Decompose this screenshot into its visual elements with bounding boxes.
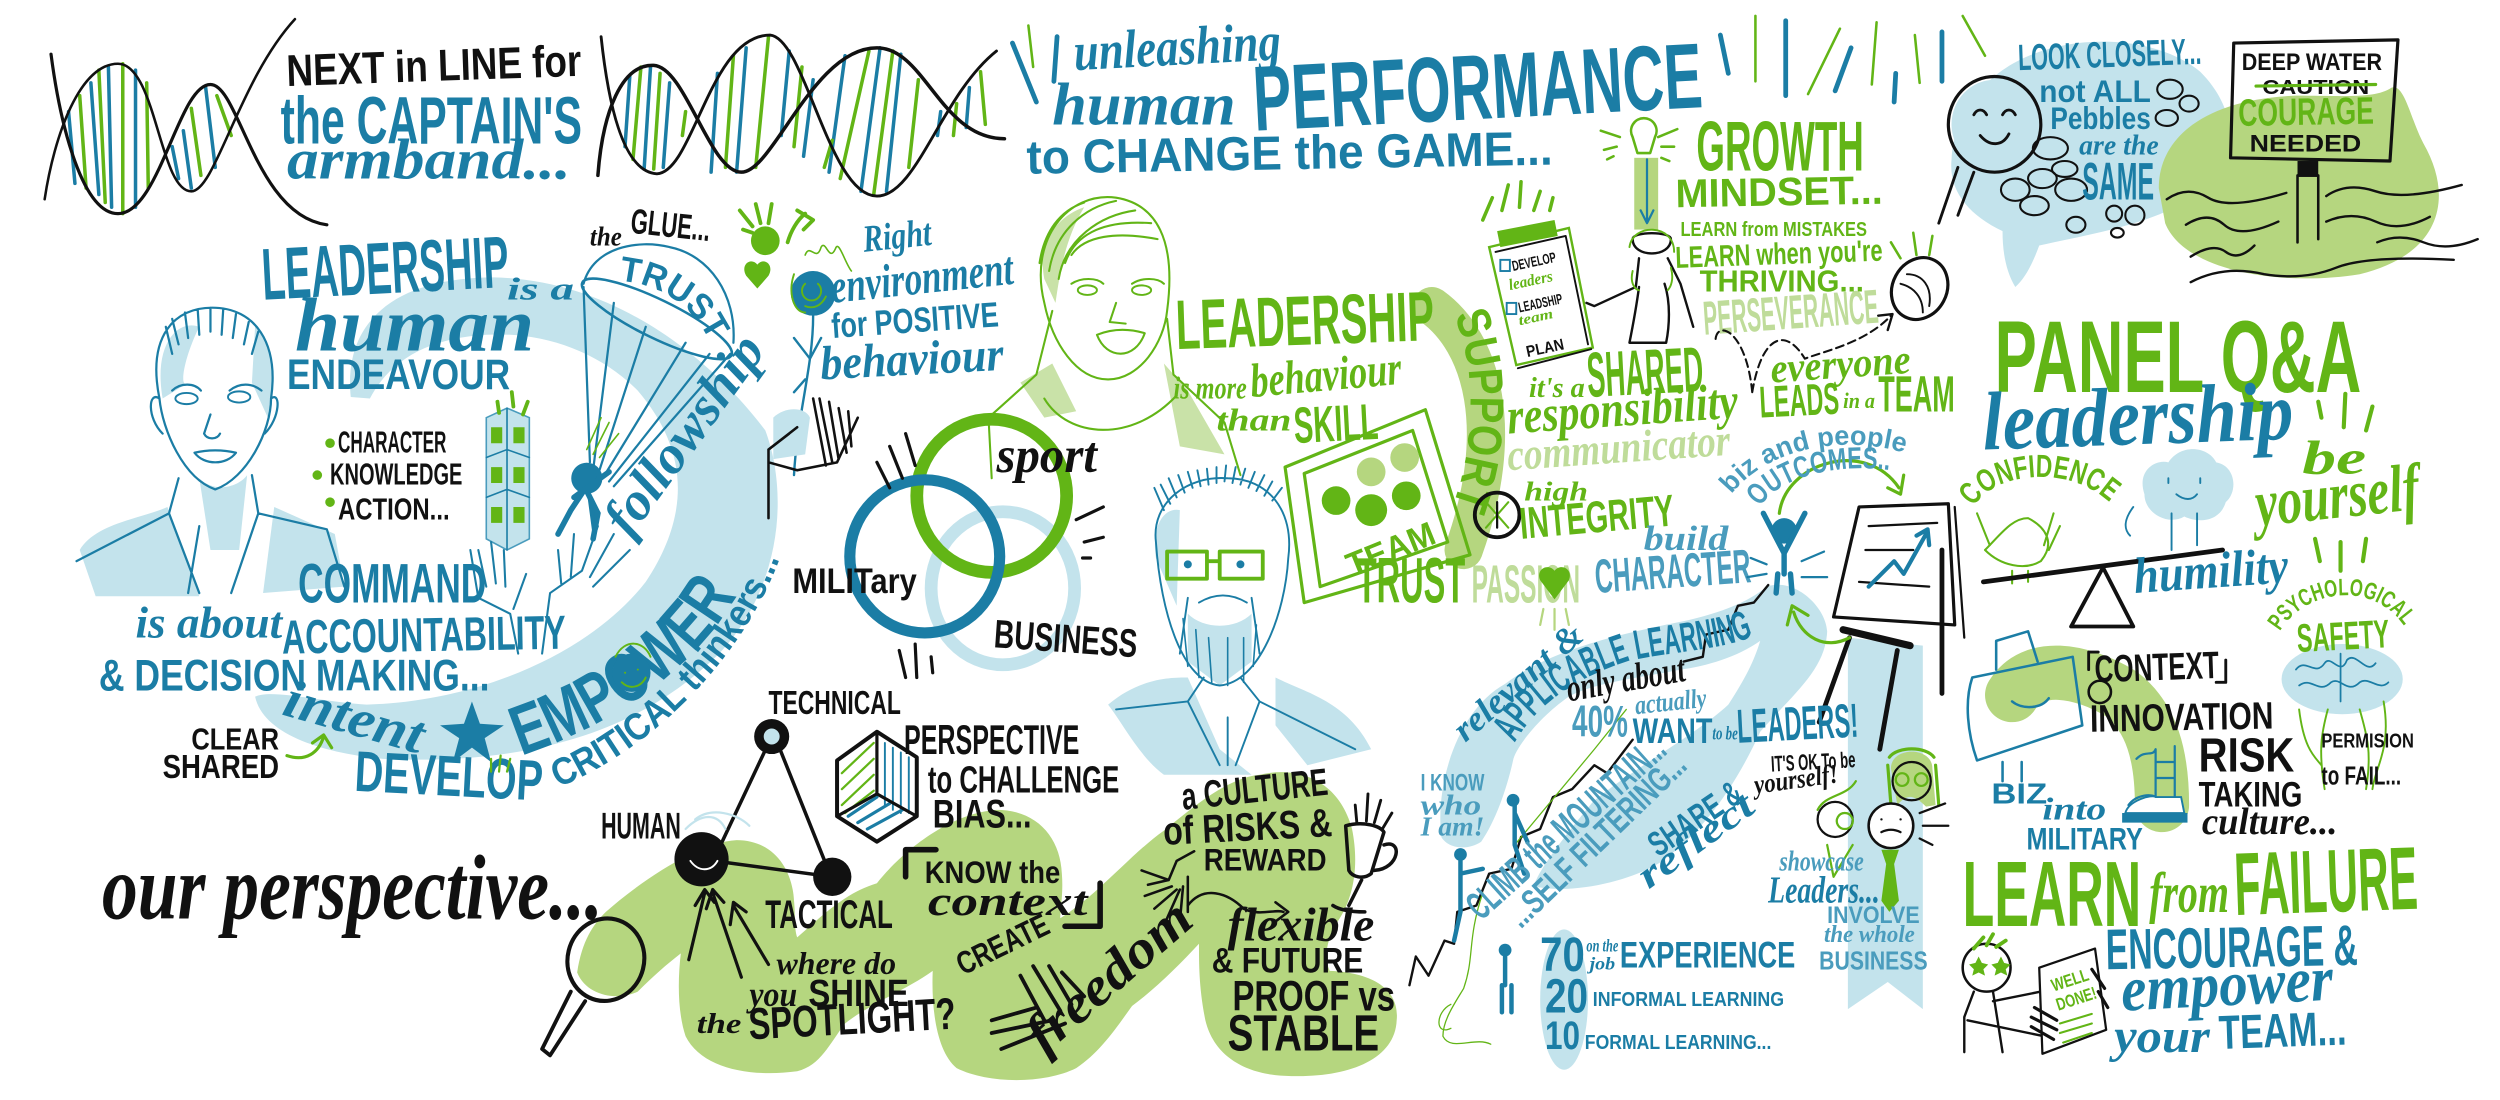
chart: venn diagram: BUSINESS (993, 612, 1139, 666)
background wash: learning blue band (1440, 585, 1827, 889)
text: where do you shine the spotlight: the (697, 1008, 742, 1040)
text: 70 20 10 learning model: EXPERIENCE (1620, 935, 1795, 976)
chart: venn diagram (792, 419, 1139, 678)
text: command accountability decision making: is about (136, 598, 284, 648)
text: showcase leaders involve the whole business: INVOLVE (1827, 902, 1920, 929)
text: clear shared: CLEAR (191, 723, 279, 756)
text: growth mindset block (1675, 108, 1883, 346)
title line: human: human (1052, 71, 1236, 138)
icon: clipboard (1483, 182, 1593, 368)
text: where do you shine the spotlight: SPOTLIGHT? (747, 990, 957, 1049)
text: flexible future proof vs stable (1188, 893, 1395, 1062)
icon: seesaw: humility (2132, 538, 2290, 605)
text: context innovation risk taking culture (2089, 644, 2337, 843)
text: leadership is more behaviour than skill: behaviour (1248, 342, 1404, 408)
text: 70 20 10 learning model: FORMAL LEARNING... (1585, 1031, 1771, 1054)
text: climb the mountain and self filtering (1458, 727, 1694, 935)
background wash: speech bubble (1951, 42, 2231, 287)
text: look closely: Pebbles (2050, 100, 2151, 136)
chart: mountain climb lines (1409, 585, 1768, 1044)
text: climb the mountain and self filtering: ...SELF FILTERING... (1500, 745, 1694, 935)
text: command accountability decision making: & DECISION MAKING... (99, 651, 489, 700)
icon: deep water sign: NEEDED (2250, 130, 2361, 157)
text: biz into military (1991, 778, 2143, 857)
icon: parachute with trust: TRUST (622, 256, 730, 334)
icon: confidence bird (1960, 454, 2122, 584)
text: encourage and empower your team: TEAM... (2218, 1003, 2347, 1060)
text: develop: DEVELOP (353, 740, 545, 814)
text: where do you shine the spotlight: you (746, 975, 797, 1014)
icon: seesaw (1983, 538, 2290, 627)
DNA helix centre (598, 35, 1004, 196)
text: everyone leads in a team: in a (1843, 388, 1875, 413)
text: only about 40 percent want to be leaders: only about (1563, 648, 1689, 710)
text: create freedom with hands: CREATE (950, 906, 1055, 982)
icon: team picture frame (1285, 410, 1470, 603)
text: biz into military: MILITARY (2026, 821, 2143, 857)
text: our perspective: our perspective... (102, 836, 603, 938)
icon: parachute with trust: the (590, 222, 622, 252)
icon: psychological safety brain (2267, 578, 2414, 790)
text: 70 20 10 learning model: 10 (1545, 1014, 1580, 1058)
portrait: blue speaker (1108, 466, 1371, 775)
text: flexible future proof vs stable: flexible (1228, 899, 1374, 952)
background wash: blue ribbon (1848, 638, 1923, 1009)
text: shared responsibility block: responsibility (1505, 374, 1740, 446)
text: culture of risks and reward (1162, 761, 1333, 877)
text: relevant and applicable learning: APPLICABLE LEARNING (1494, 612, 1751, 742)
chart: triangle of human technical tactical: HUMAN (601, 806, 681, 847)
text: PASSION (1472, 555, 1580, 615)
heading: learn from failure: LEARN (1963, 842, 2141, 946)
text: 70 20 10 learning model: job (1586, 953, 1615, 973)
text: where do you shine the spotlight (689, 890, 957, 1049)
title line: to change the game: to CHANGE the GAME... (1026, 123, 1553, 185)
title rays (1012, 16, 1985, 102)
text: showcase leaders involve the whole business: BUSINESS (1819, 947, 1928, 975)
text: shared responsibility block: it's a (1529, 372, 1585, 404)
text: PERSEVERANCE (1701, 281, 1880, 346)
text: flexible future proof vs stable: & FUTURE (1212, 941, 1363, 980)
text: right environment for positive behaviour: Right (860, 212, 934, 261)
icon: deep water sign: COURAGE (2238, 90, 2374, 135)
text: create freedom with hands (950, 887, 1204, 1064)
text: command accountability decision making (99, 552, 566, 700)
text: where do you shine the spotlight: SHINE (808, 972, 909, 1015)
text: showcase leaders involve the whole business (1767, 845, 1928, 975)
icon: deep water sign (2231, 40, 2398, 242)
icon: team picture frame: TEAM (1341, 516, 1441, 585)
text: only about 40 percent want to be leaders: to be (1712, 724, 1738, 745)
text: know the context (906, 850, 1100, 926)
chart: triangle of human technical tactical: TACTICAL (765, 893, 893, 937)
icon: magnifier (542, 910, 653, 1055)
curved text: followship: followship (591, 322, 776, 546)
text: 70 20 10 learning model: INFORMAL LEARNING (1593, 988, 1784, 1011)
text: biz into military: into (2042, 791, 2106, 826)
text: only about 40 percent want to be leaders: actually (1633, 683, 1709, 720)
title: unleashing human performance: unleashing (1072, 11, 1282, 82)
text: context innovation risk taking culture: TAKING (2199, 776, 2302, 815)
curved heading: empower: EMPOWER (508, 576, 736, 755)
icon: blue star (440, 701, 504, 762)
list: character knowledge action: ACTION... (338, 494, 450, 527)
text: showcase leaders involve the whole business: Leaders... (1767, 869, 1880, 911)
icon: psychological safety brain: PERMISION (2321, 730, 2414, 753)
text: i know who i am: I am! (1420, 811, 1484, 841)
icon: parachute with trust (555, 202, 735, 542)
script: be yourself: be (2302, 431, 2366, 484)
text: look closely: are the (2079, 130, 2159, 162)
text: leadership is more behaviour than skill: LEADERSHIP (1174, 277, 1435, 364)
text: context innovation risk taking culture: INNOVATION (2090, 695, 2274, 741)
text: growth mindset block: MINDSET... (1675, 169, 1883, 216)
title line: the captain's: the CAPTAIN'S (281, 83, 582, 158)
icon: psychological safety brain: PSYCHOLOGICAL (2267, 578, 2413, 630)
text: look closely: SAME (2082, 152, 2154, 211)
text: shared responsibility block (1505, 333, 1753, 604)
chart: triangle of human technical tactical (601, 685, 901, 937)
waves (2167, 185, 2478, 282)
text: growth mindset block: LEARN from MISTAKES (1680, 218, 1867, 241)
title: next in line (281, 37, 582, 192)
text: showcase leaders involve the whole business: showcase (1779, 845, 1864, 877)
text: command accountability decision making: ACCOUNTABILITY (281, 607, 566, 665)
heading: panel Q and A (1981, 300, 2427, 571)
background wash: bottom green wave (577, 772, 1397, 1080)
icon: person with well done paper: WELL (2049, 964, 2091, 995)
text: 70 20 10 learning model: 70 (1540, 929, 1585, 982)
text: leadership is more behaviour than skill (1173, 277, 1435, 454)
icon: bird (1142, 851, 1194, 921)
text: share and reflect: SHARE & (1641, 773, 1750, 864)
text: flexible future proof vs stable: PROOF vs (1232, 973, 1395, 1021)
icon: three people (1818, 749, 1948, 912)
text: context innovation risk taking culture: RISK (2199, 730, 2295, 783)
text: culture of risks and reward: a CULTURE (1179, 761, 1330, 819)
heading: learn from failure: from (2149, 862, 2229, 925)
icon: open hand with rays (768, 399, 858, 518)
text: only about 40 percent want to be leaders: 40% (1572, 698, 1628, 747)
text: look closely: not ALL (2039, 73, 2151, 109)
script: leadership: leadership (1981, 365, 2295, 468)
text: shared responsibility block: SHARED (1585, 333, 1705, 411)
text: climb the mountain and self filtering: CLIMB the MOUNTAIN... (1458, 727, 1674, 928)
text: know the context: context (928, 878, 1089, 924)
text: right environment for positive behaviour: behaviour (819, 328, 1005, 390)
text: it's ok to be yourself: yourself! (1750, 758, 1840, 800)
text: where do you shine the spotlight: where do (776, 946, 896, 981)
icon: easel with growth chart (1819, 504, 1964, 749)
icon: psychological safety brain: SAFETY (2296, 612, 2390, 661)
text: i know who i am: I KNOW (1421, 770, 1485, 797)
text: culture of risks and reward: of RISKS & (1162, 801, 1333, 854)
text: growth mindset block: GROWTH (1696, 108, 1864, 186)
chart: venn diagram: MILITary (792, 562, 917, 601)
text: encourage and empower your team: empower (2119, 943, 2336, 1025)
icon: blue figure and arrows: biz and people (1718, 428, 1906, 493)
text: shared responsibility block: communicator (1506, 415, 1732, 480)
text: know the context: KNOW the (925, 854, 1060, 890)
text: look closely: LOOK CLOSELY... (2017, 31, 2202, 78)
text: biz into military: BIZ (1991, 778, 2047, 810)
text: only about 40 percent want to be leaders (1563, 648, 1859, 754)
text: showcase leaders involve the whole business: the whole (1824, 922, 1915, 948)
text: leadership is more behaviour than skill: SKILL (1292, 393, 1380, 454)
DNA helix left (45, 19, 327, 225)
icon: person with well done paper (1963, 934, 2108, 1054)
text: perspective to challenge bias: PERSPECTIVE (904, 716, 1079, 763)
text: encourage and empower your team (2105, 914, 2358, 1063)
portrait: left speaker (77, 308, 344, 596)
icon: hatched cube (837, 732, 917, 842)
icon: flower with lightbulb (740, 204, 851, 475)
portrait: green speaker (989, 197, 1240, 478)
icon: parachute with trust: GLUE... (629, 202, 712, 249)
text: only about 40 percent want to be leaders: LEADERS! (1736, 695, 1859, 754)
icon: clipboard: PLAN (1525, 336, 1566, 361)
text: shared responsibility block: CHARACTER (1593, 540, 1753, 604)
text: context innovation risk taking culture: CONTEXT (2094, 644, 2220, 691)
icon: compass (1475, 493, 1519, 537)
text: share and reflect: reflect (1629, 783, 1764, 897)
icon: deep water sign: CAUTION (2262, 76, 2369, 99)
icon: lightbulb and person (1586, 118, 1693, 343)
icon: raising hands (470, 526, 630, 654)
heading: leadership is a human endeavour (260, 221, 574, 399)
list: character knowledge action: CHARACTER (338, 427, 446, 460)
heading: panel Q and A: yourself (2246, 450, 2427, 542)
text: context innovation risk taking culture: culture... (2202, 801, 2337, 843)
background wash: left blue swoosh (255, 277, 778, 760)
small text: is a: is a (507, 272, 574, 307)
text: 70 20 10 learning model: 20 (1545, 970, 1588, 1023)
title line: armband: armband... (287, 129, 571, 192)
title line: performance: PERFORMANCE (1250, 23, 1705, 151)
text: leadership is more behaviour than skill: than (1217, 402, 1291, 437)
icon: deep water sign: DEEP WATER (2242, 49, 2382, 76)
text: perspective to challenge bias: BIAS... (933, 792, 1032, 836)
text: shared responsibility block: high (1524, 477, 1588, 507)
text: 70 20 10 learning model (1540, 929, 1795, 1058)
chart: venn diagram: sport (996, 428, 1099, 484)
text: right environment for positive behaviour (819, 212, 1017, 390)
text: leadership is more behaviour than skill: is more (1173, 371, 1247, 406)
icon: person with well done paper: DONE! (2053, 983, 2099, 1015)
text: perspective to challenge bias (904, 716, 1119, 836)
text: everyone leads in a team: everyone (1769, 336, 1912, 392)
text: 70 20 10 learning model: on the (1586, 936, 1618, 956)
icon: blue figure and arrows (1718, 428, 1906, 644)
list: character knowledge action (312, 427, 462, 527)
text: create freedom with hands: freedom (1013, 887, 1204, 1064)
text: shared responsibility block: build (1644, 519, 1729, 558)
text: it's ok to be yourself: IT'S OK To be (1770, 747, 1856, 777)
text: only about 40 percent want to be leaders: WANT (1633, 712, 1713, 751)
text: support on band: SUPPORT (1456, 309, 1504, 516)
list: character knowledge action: KNOWLEDGE (330, 459, 462, 492)
text: shared responsibility block: INTEGRITY (1518, 487, 1676, 549)
text: command accountability decision making: COMMAND (298, 552, 486, 615)
heading: endeavour: ENDEAVOUR (287, 351, 510, 399)
icon: psychological safety brain: to FAIL... (2321, 762, 2401, 790)
curved text: intent: intent (277, 668, 434, 766)
text: encourage and empower your team: your (2109, 1010, 2210, 1063)
title: unleashing human performance (1026, 11, 1705, 185)
icon: building blocks (486, 392, 529, 550)
icon: trophy (1333, 794, 1396, 912)
text: clear shared: SHARED (163, 749, 279, 786)
icon: briefcase (1968, 631, 2082, 781)
text: everyone leads in a team (1758, 336, 1955, 428)
icon: clipboard: DEVELOP (1511, 250, 1558, 275)
text: everyone leads in a team: LEADS (1758, 375, 1840, 428)
heading: learn from failure (1963, 828, 2419, 946)
text: everyone leads in a team: TEAM (1878, 365, 1955, 422)
icon: magnifier with face (1939, 77, 2041, 223)
background wash: support band (1432, 306, 1486, 550)
text: right environment for positive behaviour: environment (828, 242, 1017, 314)
curved text: critical thinkers: CRITICAL thinkers... (552, 559, 779, 784)
icon: clipboard: leaders (1507, 268, 1554, 294)
text: growth mindset block: THRIVING... (1700, 266, 1864, 299)
icon: pebbles (2001, 80, 2199, 238)
text: i know who i am: who (1421, 790, 1481, 822)
text: right environment for positive behaviour: for POSITIVE (830, 295, 1000, 346)
icon: clipboard: LEADSHIP (1517, 291, 1564, 316)
heading: leadership is a human endeavour: LEADERSHIP (260, 221, 511, 316)
background wash: briefcase green arc (2012, 673, 2162, 805)
background wash: green circle (2159, 87, 2439, 278)
text: flexible future proof vs stable: STABLE (1228, 1005, 1379, 1062)
text: clear shared (163, 723, 332, 786)
icon: clipboard: team (1517, 306, 1555, 329)
text: growth mindset block: LEARN when you're (1675, 235, 1883, 275)
text: develop (353, 740, 545, 814)
text: culture of risks and reward: REWARD (1204, 841, 1327, 877)
icon: rugby ball and bounce path (1716, 233, 1959, 392)
text: relevant and applicable learning: relevant & (1445, 615, 1591, 749)
text: i know who i am (1420, 770, 1485, 841)
text: perspective to challenge bias: to CHALLENGE (928, 758, 1119, 801)
icon: boot and ladder (2122, 746, 2188, 823)
icon: humility cloud tree (2126, 449, 2233, 550)
icon: confidence bird: CONFIDENCE (1960, 454, 2122, 502)
text: share and reflect (1629, 773, 1764, 897)
text: look closely (2017, 31, 2202, 211)
chart: triangle of human technical tactical: TECHNICAL (768, 685, 901, 722)
background wash: 70-20-10 bubble (1540, 929, 1588, 1070)
text: trust and passion: TRUST (1357, 545, 1465, 617)
script: human: human (295, 283, 534, 368)
icon: green face on empower (612, 644, 651, 692)
title: next in line: NEXT in LINE for (286, 37, 582, 96)
